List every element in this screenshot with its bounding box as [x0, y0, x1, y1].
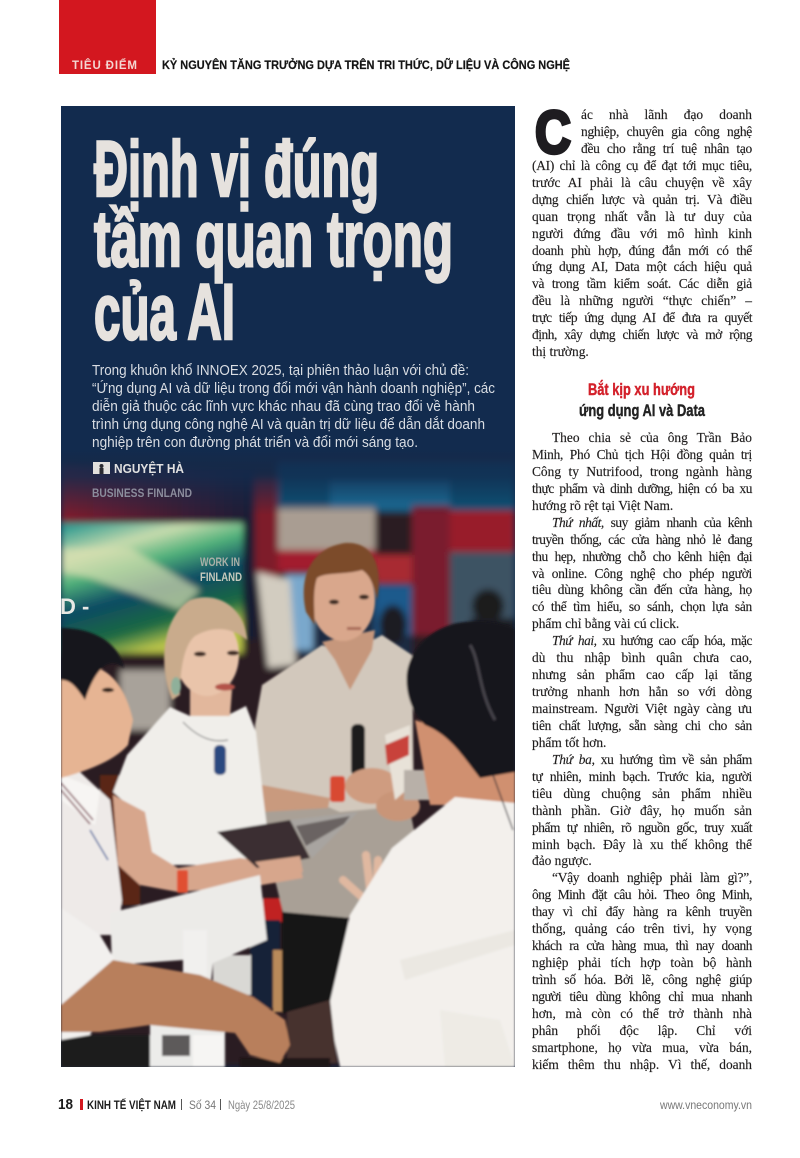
standfirst: trình ứng dụng công nghệ AI và quản trị dữ liệu để dẫn dắt doanh — [92, 416, 485, 433]
text block: article body: phân phối độc lập. Chỉ với — [532, 1023, 752, 1038]
footer: page number and publication: Số 34 — [189, 1098, 216, 1112]
text block: article body: mainstream. Người Việt ngày càng ưu — [532, 701, 752, 716]
text block: intro paragraph: (AI) chỉ là công cụ để đạt tới mục tiêu, — [532, 158, 752, 173]
text block: article body: kiếm thêm thu nhập. Vì thế, doanh — [532, 1057, 752, 1072]
byline: NGUYỆT HÀ — [114, 461, 185, 476]
text block: intro paragraph: dựng chiến lược và quản trị. Và điều — [532, 192, 752, 207]
text block: article body: trưởng nhanh hơn hẳn so với dòng — [532, 684, 752, 699]
young man on the left — [61, 628, 133, 935]
title: Định vị đúng — [94, 124, 379, 213]
section tag: red block — [59, 0, 156, 74]
text block: article body: và online. Công nghệ cho phép người — [532, 566, 752, 580]
panel: hero with photo — [60, 106, 515, 1067]
text block: article body: Thứ hai, xu hướng cao cấp hóa, mặc — [552, 633, 752, 648]
text block: intro paragraph: ác nhà lãnh đạo doanh — [581, 107, 752, 122]
text block: article body: tự nhiên, minh bạch. Trước kia, người — [532, 769, 752, 784]
footer: page number and publication: 18 — [58, 1096, 73, 1113]
icon: author — [93, 462, 110, 474]
text block: article body: nghiệp phải tích hợp toàn bộ hành — [532, 955, 752, 970]
text block: article body: hơn, mà còn có thể trở thành nhà — [532, 1006, 752, 1021]
text block: article body: đảo ngược. — [532, 853, 592, 868]
text block: article body: Công ty Nutrifood, trong ngành hàng — [532, 464, 752, 479]
photo: expo booth background — [61, 452, 515, 1067]
text block: article body: Theo chia sẻ của ông Trần Bảo — [552, 430, 752, 445]
title: tầm quan trọng — [94, 194, 453, 283]
text block: article body: thống, quảng cáo trên tivi, hy vọng — [532, 921, 752, 936]
footer: page number and publication: Ngày 25/8/2025 — [228, 1098, 295, 1112]
subheading: Bắt kịp xu hướng — [588, 380, 695, 399]
text block: intro paragraph: người đứng đầu với mô hình kinh — [532, 226, 752, 241]
text block: article body: phẩm chỉ bằng vài cú click. — [532, 616, 679, 631]
text block: article body: thu hẹp, nhường chỗ cho kênh hiện đại — [532, 549, 752, 564]
drop cap: C — [535, 99, 571, 166]
standfirst: “Ứng dụng AI và dữ liệu trong đổi mới vận hành doanh nghiệp”, các — [92, 380, 495, 397]
title: của AI — [94, 267, 235, 356]
foreground forearm and white sleeve — [61, 932, 292, 1065]
text block: article body: ông Minh đặt câu hỏi. Theo ông Minh, — [532, 887, 752, 902]
photo: people — [61, 543, 515, 1067]
standfirst: diễn giả thuộc các lĩnh vực khác nhau đã cùng trao đổi về hành — [92, 398, 475, 415]
section tag: red block: TIÊU ĐIỂM — [72, 59, 137, 72]
text block: article body: Thứ ba, xu hướng tìm về sản phẩm — [552, 752, 752, 767]
text block: article body: phẩm tốt hơn. — [532, 735, 606, 750]
text block: intro paragraph: nghiệp, chuyên gia công nghệ — [581, 124, 752, 139]
text block: article body: khách ra cửa hàng mua, thì nay doanh — [532, 938, 752, 953]
footer: page number and publication — [58, 1096, 295, 1113]
footer: website: www.vneconomy.vn — [659, 1098, 752, 1112]
photo: booth signage — [60, 486, 242, 619]
woman with blonde hair — [113, 597, 358, 893]
subheading: ứng dụng AI và Data — [579, 401, 705, 420]
text block: article body: tiêu dùng không cần đến cửa hàng, họ — [532, 582, 752, 597]
standfirst: nghiệp trên con đường phát triển và đổi mới sáng tạo. — [92, 434, 418, 451]
standfirst: Trong khuôn khổ INNOEX 2025, tại phiên thảo luận với chủ đề: — [92, 362, 469, 379]
white board and table items — [61, 875, 337, 1067]
text block: article body: Minh, Phó Chủ tịch Hội đồng quản trị — [532, 447, 752, 462]
text block: article body: thay vì chỉ đẩy hàng ra kênh truyền — [532, 904, 752, 919]
text block: article body: trình số hóa. Bởi lẽ, công nghệ giúp — [532, 972, 752, 987]
text block: intro paragraph: thị trường. — [532, 344, 589, 359]
text block: article body: smartphone, họ vừa mua, vừa bán, — [532, 1040, 752, 1055]
title — [94, 124, 453, 356]
text block: article body: hướng rõ rệt tại Việt Nam. — [532, 498, 673, 513]
text block: article body: “Vậy doanh nghiệp phải làm gì?”, — [552, 870, 752, 885]
text block: article body: phẩm tự nhiên, rõ nguồn gốc, truy xuất — [532, 820, 752, 835]
standfirst — [92, 362, 495, 451]
text block: intro paragraph: trực tiếp ứng dụng AI để đưa ra quyết — [532, 310, 752, 325]
man in beige shirt — [255, 543, 432, 1013]
fade from navy panel into photo — [61, 445, 515, 515]
text block: article body: Thứ nhất, suy giảm nhanh của kênh — [552, 515, 752, 530]
text block: article body: thực phẩm và dinh dưỡng, hiện có ba xu — [532, 481, 752, 496]
photo: booth signage: BUSINESS FINLAND — [92, 486, 192, 500]
text block: article body: tiên chất lượng, sẵn sàng chi cho sản — [532, 718, 752, 733]
text block: article body: dù thu nhập bình quân chưa cao, — [532, 650, 752, 665]
photo: booth signage: WORK IN — [200, 557, 240, 569]
subheading — [579, 380, 705, 420]
text block: article body: có thể tìm hiểu, so sánh, chọn lựa sản — [532, 599, 752, 614]
text block: article body: người tiêu dùng không chỉ mua nhanh — [532, 989, 752, 1004]
footer: page number and publication: KINH TẾ VIỆT NAM — [87, 1097, 176, 1112]
text block: intro paragraph: doanh phù hợp, đúng đắn mới có thể — [532, 242, 752, 258]
photo: booth signage: FINLAND — [200, 572, 242, 584]
text block: article body: minh bạch. Đây là xu thế không thể — [532, 836, 752, 852]
text block: intro paragraph: trước AI phải là câu chuyện về xây — [532, 175, 752, 190]
text block: intro paragraph: ứng dụng AI, Data một cách hiệu quả — [532, 259, 752, 274]
text block: intro paragraph: định, xây dựng chiến lược và mở rộng — [532, 327, 752, 342]
text block: intro paragraph: đều cho rằng trí tuệ nhân tạo — [581, 141, 752, 156]
woman seen from behind — [328, 622, 515, 1067]
text block: article body: tiêu dùng chuộng sản phẩm nhiều — [532, 786, 752, 801]
text block: article body — [532, 430, 752, 1072]
text block: article body: truyền thống, các cửa hàng nhỏ lẻ đang — [532, 532, 752, 547]
text block: intro paragraph: quan trọng nhất vẫn là tư duy của — [532, 209, 752, 224]
text block: intro paragraph: và trong tầm kiểm soát. Các diễn giả — [532, 276, 752, 291]
text block: article body: thành phần. Giờ đây, họ muốn sản — [532, 803, 752, 818]
text block: intro paragraph — [532, 107, 752, 360]
photo: booth signage: D - — [60, 594, 89, 619]
section headline: KỶ NGUYÊN TĂNG TRƯỞNG DỰA TRÊN TRI THỨC, DỮ LIỆU VÀ CÔNG NGHỆ — [162, 57, 570, 72]
text block: article body: nhưng sản phẩm cao cấp lại tăng — [532, 667, 752, 682]
text block: intro paragraph: đều là những người “thực chiến” – — [532, 293, 752, 308]
